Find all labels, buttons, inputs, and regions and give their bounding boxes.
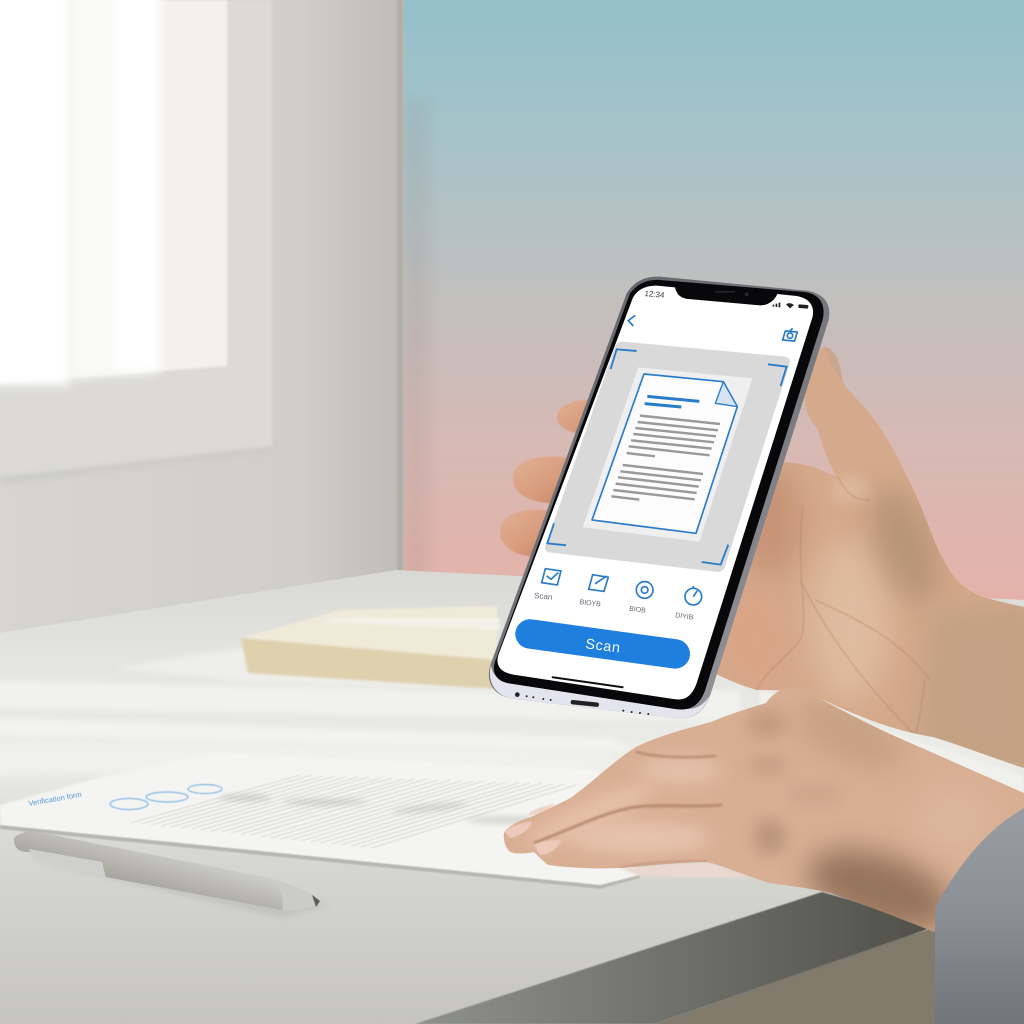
fingernails (505, 804, 561, 855)
left wall with window (0, 0, 404, 640)
status bar: 12:34 (644, 289, 665, 300)
bottom ports (515, 692, 649, 715)
icon: target (636, 582, 653, 598)
phone body (489, 277, 829, 718)
icon: scan (542, 569, 561, 585)
screen (497, 286, 813, 700)
document body lines (611, 416, 720, 500)
reflection under fingers (620, 862, 750, 878)
home indicator (553, 677, 623, 687)
desk surface (0, 570, 1024, 1024)
finger creases (534, 752, 722, 868)
back arrow (628, 315, 635, 326)
toolbar labels (534, 591, 694, 622)
desk front edge (415, 892, 940, 1024)
toolbar icons (542, 569, 702, 605)
paper text lines (131, 775, 576, 848)
paper header text: Verification form (28, 790, 82, 808)
scan corner brackets (547, 349, 787, 565)
scan area (545, 342, 790, 572)
floor under desk (655, 900, 1024, 1024)
background wall gradient (396, 0, 1024, 625)
upper hand holding phone (500, 340, 1024, 790)
document (592, 374, 737, 533)
toolbar labels: BIOB (629, 606, 646, 615)
pen (14, 831, 330, 918)
paper document on desk (0, 753, 640, 889)
bottom rim highlight (490, 665, 709, 718)
palm creases (757, 477, 930, 738)
paper blurred shadow smudges (219, 794, 543, 824)
window light (0, 0, 227, 385)
scan button: Scan (585, 636, 622, 657)
icon: gauge (685, 586, 702, 605)
phone (489, 277, 829, 718)
toolbar labels: Scan (534, 591, 553, 602)
palm and thumb (716, 347, 1024, 768)
thumb nail (825, 347, 841, 380)
paper circles (110, 784, 222, 810)
document heading lines (645, 396, 699, 407)
grey sleeve (935, 808, 1024, 1024)
toolbar labels: DIYIB (675, 612, 694, 622)
bezel (494, 280, 824, 710)
scan button (530, 634, 675, 657)
top right timer icon (783, 328, 797, 341)
notebook on desk (241, 606, 500, 689)
icon: edit (589, 575, 608, 591)
toolbar labels: BIOYB (579, 599, 601, 609)
lower hand on paper (500, 680, 1024, 946)
fingers behind phone (500, 400, 610, 557)
